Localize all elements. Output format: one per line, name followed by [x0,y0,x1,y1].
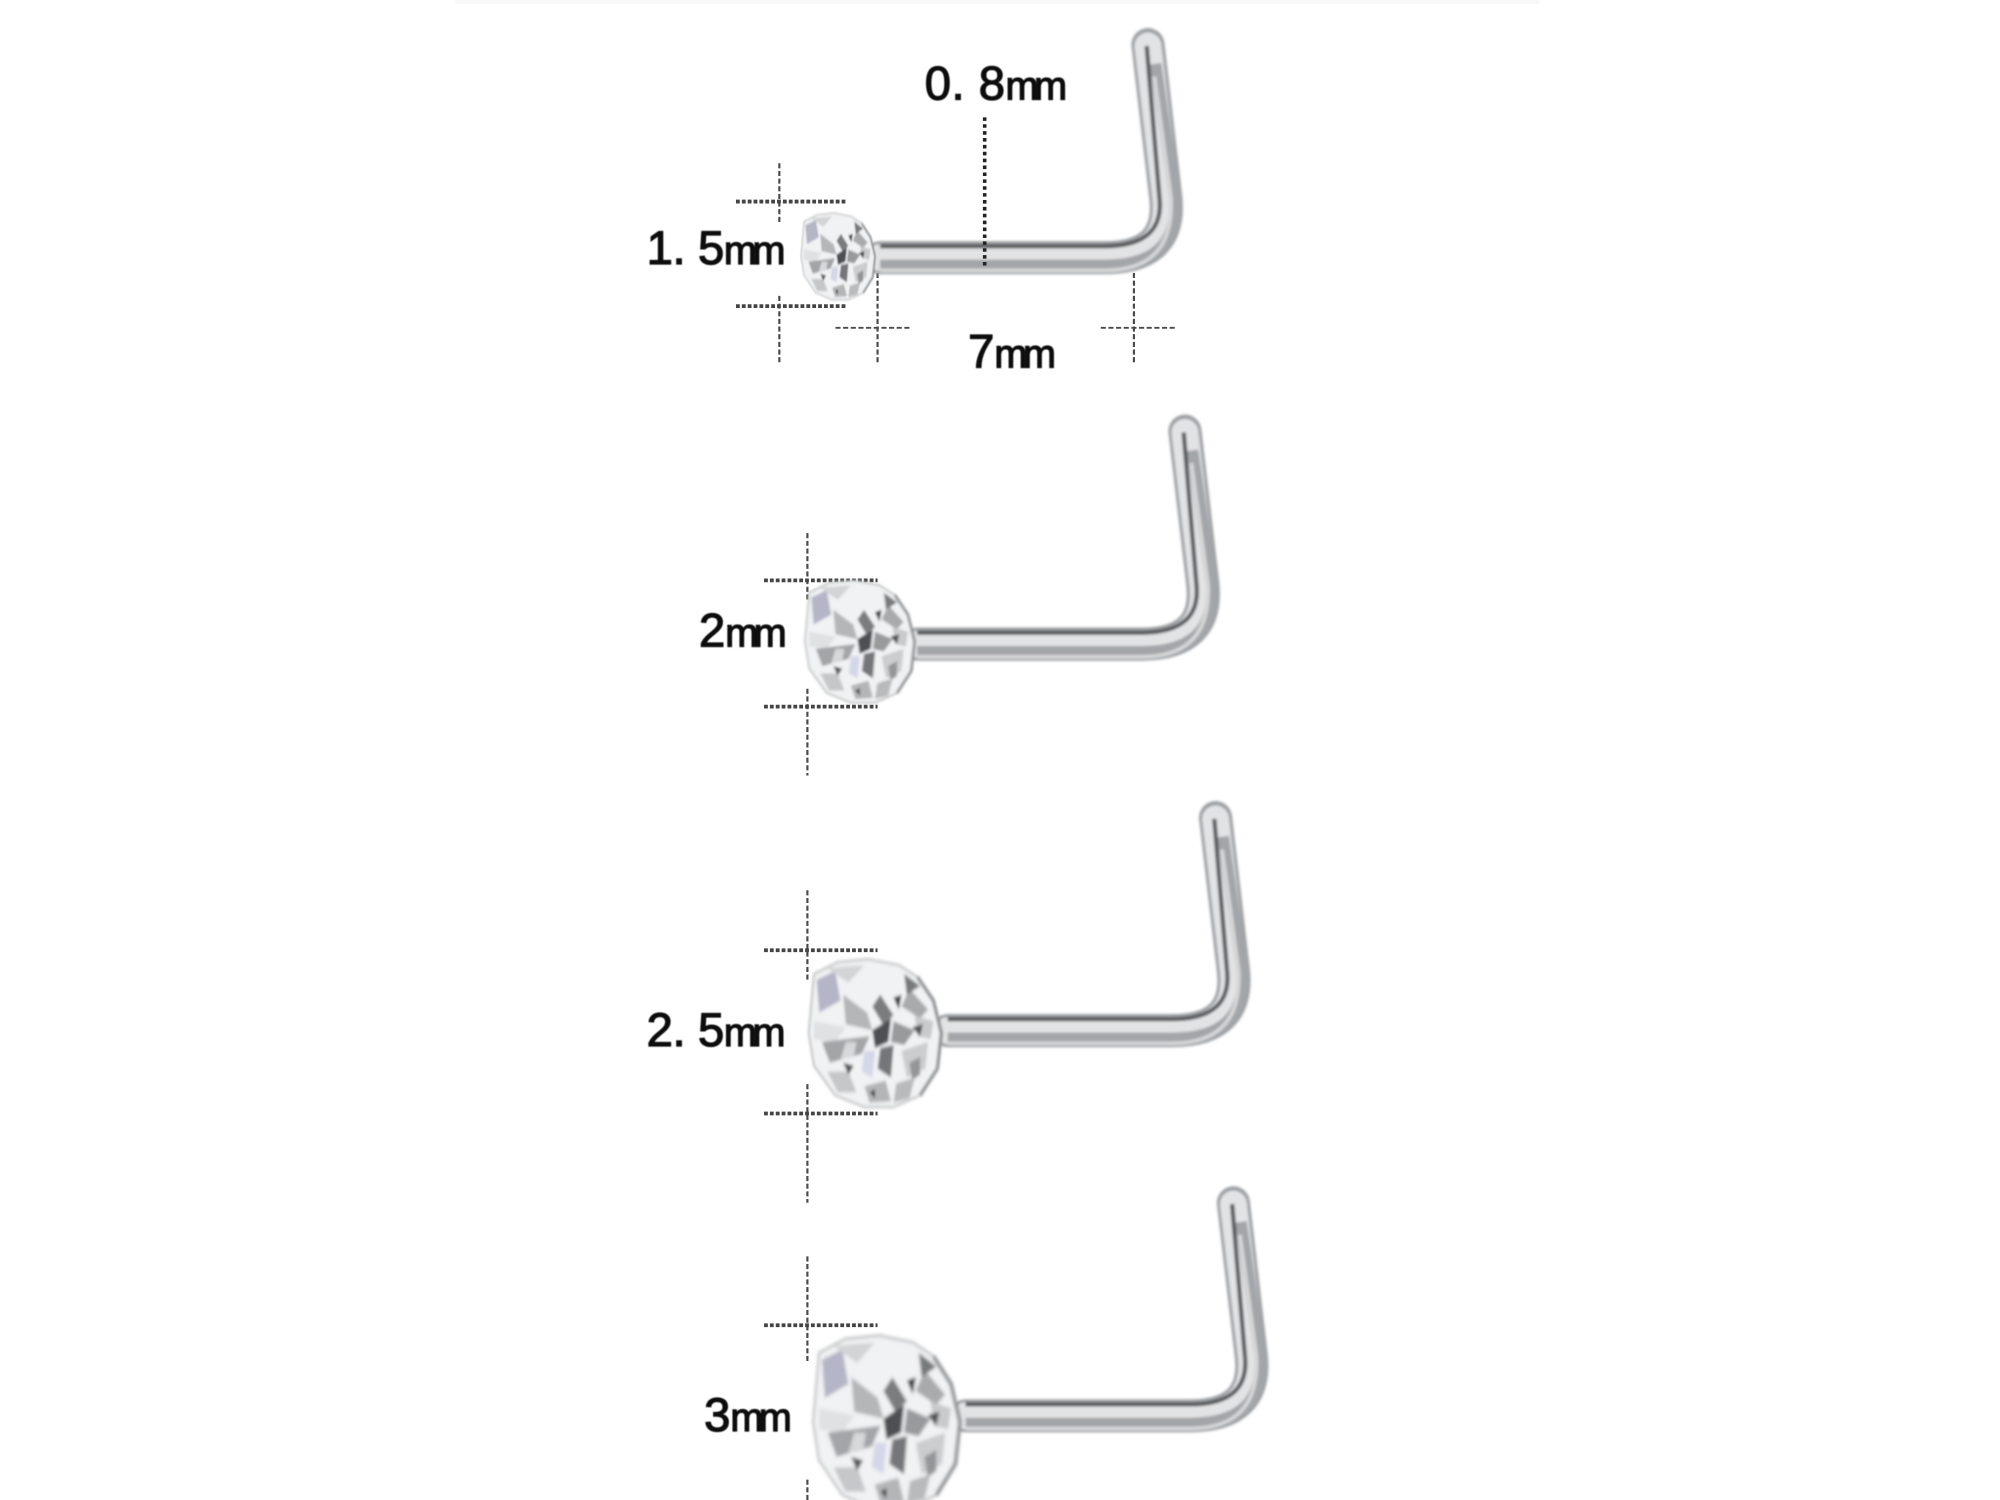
pin: 2mm stud [699,431,1212,776]
label: 2mm: 2mm [699,605,785,658]
dimension lines: 2.5mm [764,890,878,1203]
faint top band [455,0,1540,4]
tube [966,1203,1261,1429]
label: 3mm: 3mm [704,1389,790,1442]
gem [801,213,875,300]
label: 7mm: 7mm [968,325,1054,378]
tube [880,45,1175,270]
pin: 1.5mm stud [647,45,1177,378]
label: 1.5mm: 1. 5mm [647,222,783,275]
pin: 3mm stud [704,1203,1261,1500]
label: 0.8mm: 0. 8mm [925,57,1065,110]
tube [917,431,1212,657]
label: 2.5mm: 2. 5mm [647,1004,783,1057]
tube [948,818,1243,1043]
dimension lines: 1.5mm [736,163,1177,365]
gem [809,959,941,1107]
dimension lines: 3mm [764,1256,878,1500]
gem [805,580,915,703]
pin: 2.5mm stud [647,818,1243,1203]
gem [813,1335,960,1500]
dotted gauge line [983,117,986,268]
dimension lines: 2mm [764,533,878,776]
